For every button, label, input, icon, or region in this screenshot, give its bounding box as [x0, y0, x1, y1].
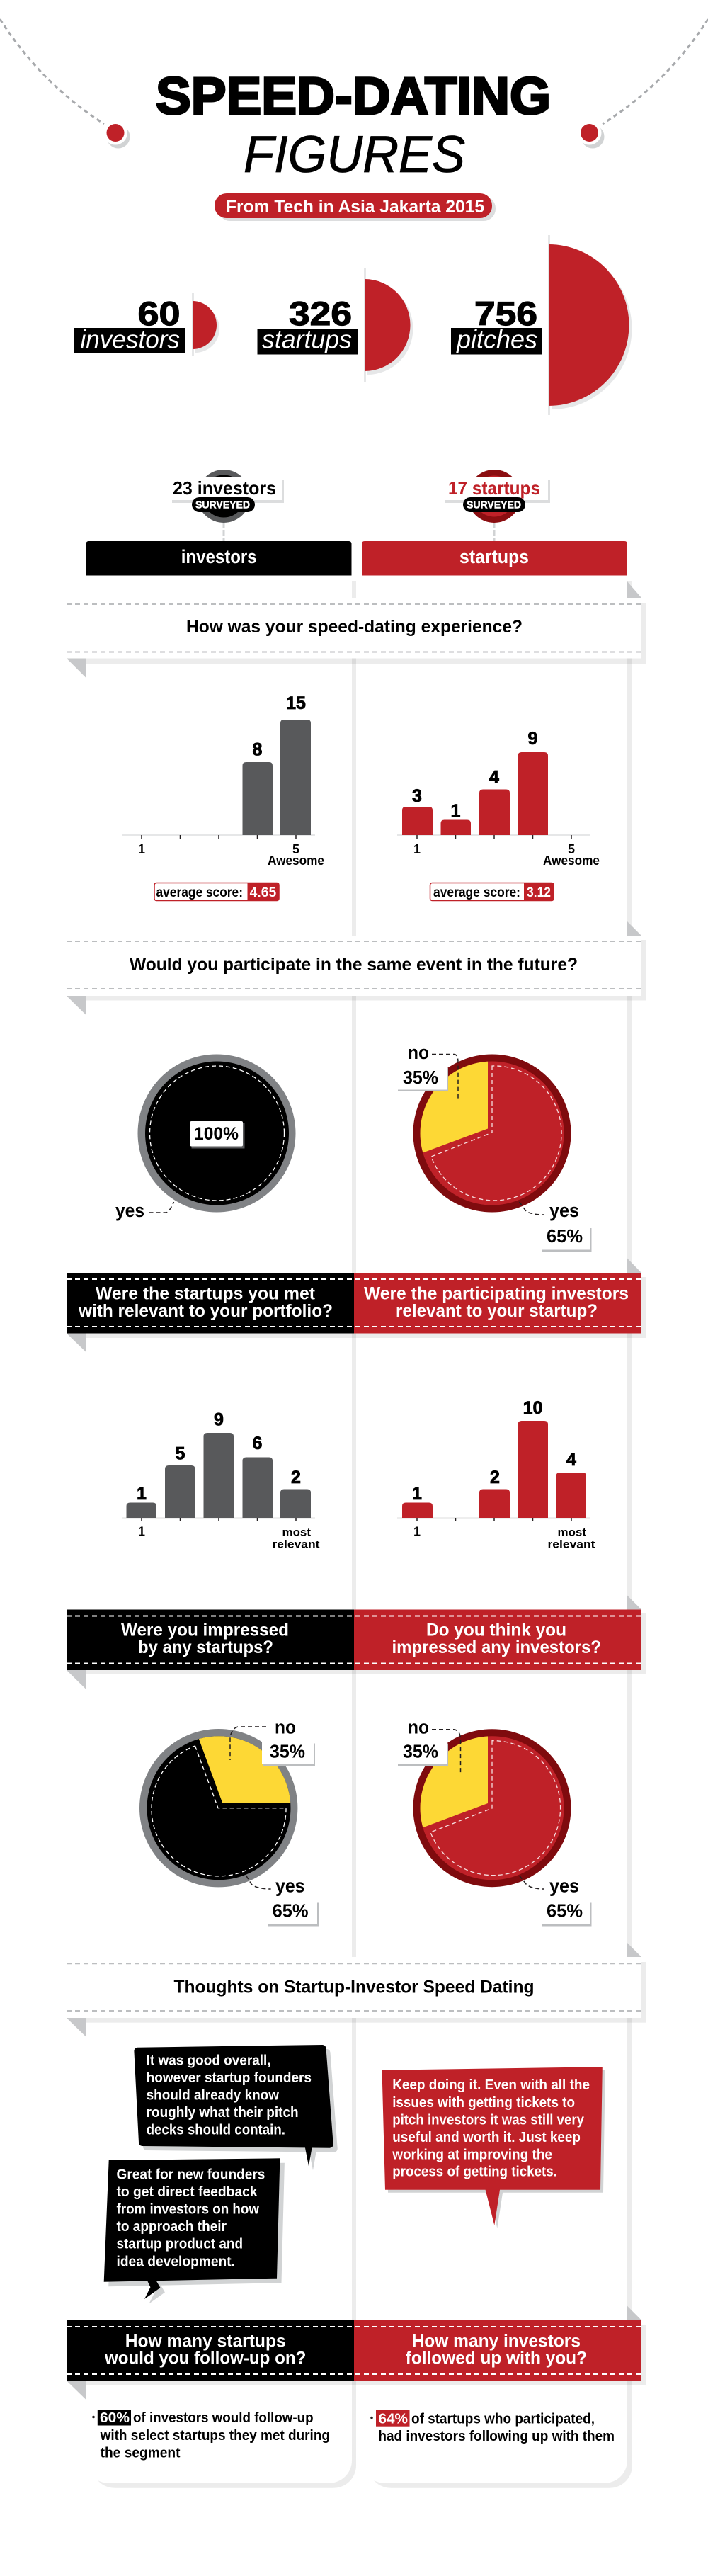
- score: startups average: [430, 883, 554, 901]
- bar chart: startups relevance: most: [558, 1527, 587, 1538]
- bar chart: startups experience: 1: [413, 842, 421, 856]
- pie chart: startups impressed: [396, 1716, 592, 1927]
- bar chart: startups relevance: 1: [413, 1524, 421, 1538]
- ribbon: relevance questions: [67, 1258, 646, 1352]
- ribbon: follow-up questions: followed up with you?: [406, 2349, 587, 2368]
- stat: 60 investors: [74, 293, 219, 356]
- bar chart: investors relevance: relevant: [272, 1538, 320, 1551]
- title: [156, 67, 551, 183]
- ribbon: thoughts heading: Thoughts on Startup-Investor Speed Dating: [174, 1977, 534, 1997]
- ribbon: relevance questions: relevant to your startup?: [396, 1301, 598, 1321]
- bar chart: investors relevance: 1: [137, 1484, 147, 1504]
- badge: 17 startups surveyed: SURVEYED: [467, 500, 521, 511]
- pie chart: investors would participate: yes: [115, 1200, 144, 1221]
- header: startups: startups: [459, 546, 529, 567]
- speech bubble: investor quote 2: [104, 2158, 285, 2303]
- bar chart: startups experience: Awesome: [543, 853, 600, 868]
- pie chart: investors impressed: yes: [275, 1876, 304, 1897]
- text block: investors follow-up: 60%: [100, 2410, 130, 2426]
- bar chart: investors relevance: 5: [176, 1443, 185, 1463]
- bar chart: investors relevance: 2: [291, 1468, 301, 1487]
- stat: 60 investors: investors: [81, 324, 180, 354]
- pie chart: startups impressed: 35%: [403, 1741, 438, 1762]
- stat: 60 investors: 60: [137, 295, 180, 332]
- speech bubble: investor quote 1: however startup founders: [147, 2070, 312, 2086]
- bar chart: investors relevance: 1: [138, 1524, 145, 1538]
- speech bubble: startup quote: [382, 2067, 605, 2228]
- ribbon: question 1: [67, 581, 646, 678]
- text block: investors follow-up: with select startups they met during: [100, 2428, 330, 2444]
- badge: 17 startups surveyed: 17 startups: [448, 477, 540, 499]
- score: investors average: average score:: [156, 885, 243, 900]
- text block: investors follow-up: the segment: [101, 2445, 181, 2461]
- ribbon: relevance questions: with relevant to your portfolio?: [78, 1301, 333, 1321]
- bar chart: startups experience: 1: [451, 801, 461, 821]
- speech bubble: investor quote 1: roughly what their pitch: [147, 2105, 299, 2121]
- pie chart: startups impressed: 65%: [547, 1900, 583, 1922]
- score: startups average: 3.12: [527, 885, 551, 900]
- badge: 23 investors surveyed: 23 investors: [173, 477, 276, 499]
- text block: startups follow-up: had investors following up with them: [378, 2429, 615, 2444]
- speech bubble: investor quote 2: to approach their: [116, 2219, 227, 2235]
- speech bubble: investor quote 2: startup product and: [116, 2236, 243, 2252]
- decorative hanging string left: [0, 19, 130, 149]
- title: SPEED-DATING: [156, 67, 551, 125]
- speech bubble: investor quote 2: Great for new founders: [116, 2167, 265, 2183]
- pie chart: startups impressed: yes: [549, 1876, 579, 1897]
- ribbon: question 2: Would you participate in the same event in the future?: [130, 955, 578, 975]
- score: investors average: 4.65: [250, 885, 277, 900]
- pie chart: investors impressed: 65%: [273, 1900, 309, 1922]
- ribbon: relevance questions: Were the participating investors: [364, 1283, 629, 1303]
- bar chart: startups relevance: relevant: [548, 1538, 595, 1551]
- pie chart: investors impressed: [139, 1716, 319, 1927]
- bar chart: investors relevance: 6: [253, 1434, 262, 1453]
- stat: 326 startups: 326: [289, 295, 352, 332]
- pie chart: startups would participate: [396, 1042, 592, 1252]
- pie chart: investors would participate: 100%: [194, 1124, 239, 1144]
- bar chart: startups experience: 9: [528, 729, 537, 749]
- ribbon: thoughts heading: [67, 1943, 646, 2037]
- stat: 756 pitches: [451, 235, 632, 415]
- ribbon: impressed questions: Were you impressed: [121, 1621, 289, 1640]
- speech bubble: investor quote 1: [137, 2048, 334, 2170]
- speech bubble: startup quote: useful and worth it. Just keep: [392, 2130, 581, 2145]
- title: FIGURES: [244, 126, 465, 183]
- speech bubble: investor quote 1: should already know: [147, 2087, 279, 2103]
- decorative hanging string right: [578, 19, 708, 149]
- speech bubble: investor quote 2: from investors on how: [116, 2202, 259, 2218]
- bar chart: investors relevance: [122, 1410, 320, 1551]
- ribbon: relevance questions: Were the startups you met: [96, 1283, 316, 1303]
- badge: 23 investors surveyed: SURVEYED: [195, 500, 250, 511]
- speech bubble: investor quote 1: decks should contain.: [147, 2122, 285, 2138]
- bar chart: startups relevance: 4: [566, 1450, 576, 1470]
- score: startups average: average score:: [433, 885, 520, 900]
- speech bubble: startup quote: issues with getting tickets to: [392, 2095, 575, 2111]
- bar chart: investors experience: 8: [253, 739, 263, 759]
- pie chart: investors would participate: [115, 1054, 296, 1221]
- bar chart: startups experience: [397, 729, 600, 868]
- ribbon: impressed questions: by any startups?: [138, 1638, 273, 1657]
- subtitle pill: [215, 193, 496, 221]
- bar chart: startups relevance: 2: [490, 1468, 500, 1487]
- bar chart: investors experience: 1: [138, 842, 145, 856]
- pie chart: startups would participate: 65%: [547, 1225, 583, 1247]
- bar chart: investors relevance: 9: [214, 1410, 224, 1430]
- bar chart: startups relevance: 10: [523, 1398, 542, 1418]
- text block: startups follow-up: 64%: [378, 2412, 408, 2427]
- pie chart: startups would participate: yes: [549, 1200, 579, 1221]
- speech bubble: startup quote: working at improving the: [392, 2147, 552, 2162]
- bar chart: startups experience: 4: [489, 768, 499, 788]
- text block: investors follow-up: [92, 2410, 330, 2461]
- ribbon: question 2: [67, 921, 646, 1015]
- bar chart: investors experience: 5: [292, 842, 299, 856]
- bar chart: investors experience: [122, 693, 324, 868]
- speech bubble: startup quote: pitch investors it was still very: [392, 2112, 585, 2128]
- badge: 17 startups surveyed: [443, 470, 550, 541]
- speech bubble: startup quote: Keep doing it. Even with all the: [392, 2077, 590, 2093]
- score: investors average: [154, 883, 279, 901]
- speech bubble: investor quote 1: It was good overall,: [147, 2053, 271, 2069]
- stat: 326 startups: startups: [262, 324, 352, 354]
- header: investors: investors: [181, 546, 257, 567]
- bar chart: investors experience: Awesome: [268, 853, 324, 868]
- bar chart: startups relevance: 1: [412, 1484, 422, 1504]
- pie chart: startups impressed: no: [408, 1716, 429, 1737]
- ribbon: follow-up questions: [67, 2306, 646, 2400]
- ribbon: follow-up questions: How many investors: [412, 2331, 581, 2351]
- bar chart: startups experience: 3: [412, 786, 422, 806]
- badge: 23 investors surveyed: [170, 470, 284, 541]
- ribbon: impressed questions: Do you think you: [426, 1621, 566, 1640]
- stat: 756 pitches: 756: [474, 295, 537, 332]
- ribbon: impressed questions: impressed any investors?: [392, 1638, 601, 1657]
- speech bubble: startup quote: process of getting tickets.: [392, 2164, 557, 2180]
- text block: startups follow-up: of startups who participated,: [411, 2412, 595, 2427]
- stat: 756 pitches: pitches: [456, 324, 537, 354]
- ribbon: follow-up questions: How many startups: [125, 2331, 286, 2351]
- text block: investors follow-up: of investors would follow-up: [133, 2410, 314, 2426]
- bar chart: investors relevance: most: [282, 1527, 312, 1538]
- pie chart: startups would participate: no: [408, 1042, 429, 1063]
- bar chart: startups experience: 5: [568, 842, 575, 856]
- panel: startups column: [362, 581, 632, 2488]
- panel: investors column: [86, 581, 356, 2488]
- bar chart: investors experience: 15: [286, 693, 306, 713]
- header: investors: [86, 541, 351, 575]
- pie chart: startups would participate: 35%: [403, 1067, 438, 1088]
- ribbon: impressed questions: [67, 1595, 646, 1689]
- speech bubble: investor quote 2: idea development.: [116, 2254, 235, 2269]
- header: startups: [362, 541, 627, 575]
- speech bubble: investor quote 2: to get direct feedback: [116, 2184, 258, 2200]
- subtitle pill: From Tech in Asia Jakarta 2015: [226, 197, 484, 217]
- ribbon: follow-up questions: would you follow-up on?: [104, 2349, 306, 2368]
- pie chart: investors impressed: no: [275, 1716, 296, 1737]
- ribbon: question 1: How was your speed-dating experience?: [186, 617, 523, 637]
- pie chart: investors impressed: 35%: [270, 1741, 305, 1762]
- bar chart: startups relevance: [397, 1398, 595, 1551]
- stat: 326 startups: [258, 268, 413, 382]
- text block: startups follow-up: [370, 2410, 615, 2444]
